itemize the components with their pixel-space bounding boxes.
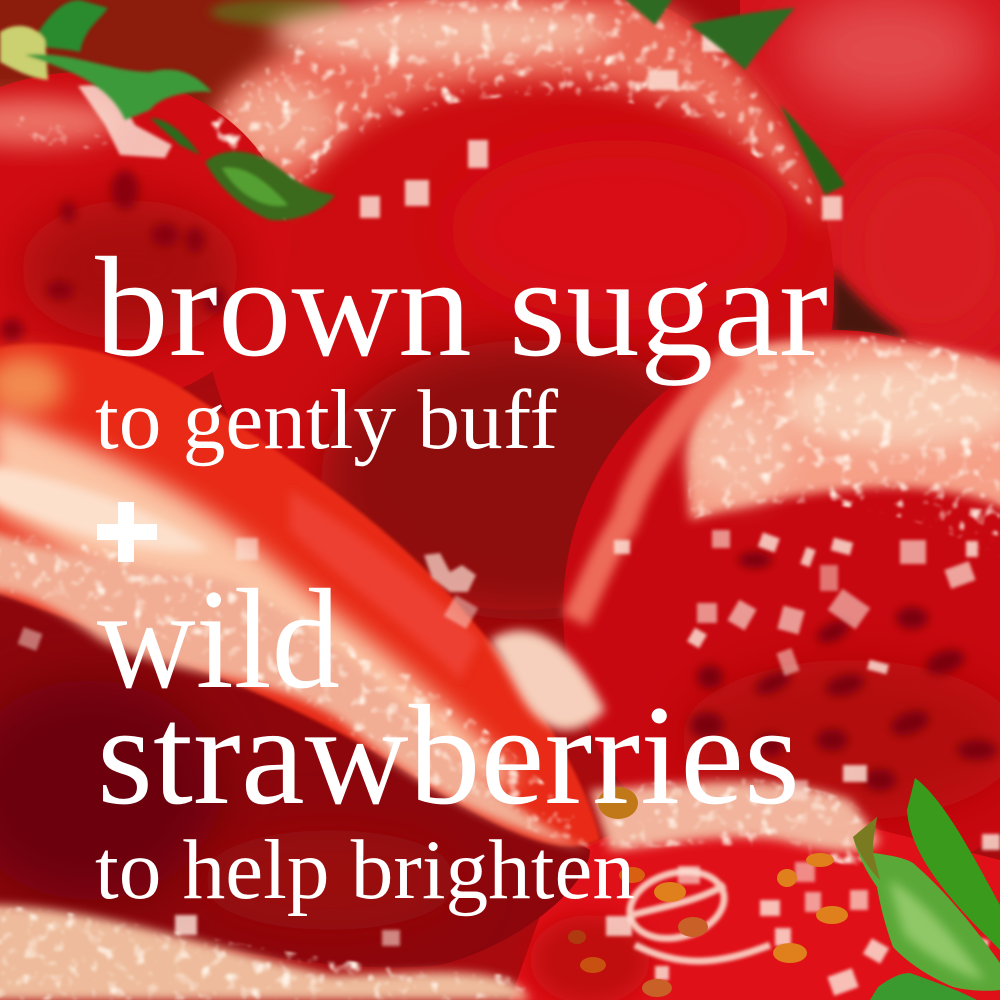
red flesh rim highlight <box>290 490 480 680</box>
dark backdrop top left <box>0 0 340 110</box>
heading: strawberries: strawberries <box>97 676 800 834</box>
strawberry seeds <box>568 787 848 997</box>
orange tip <box>0 355 65 415</box>
subheading: to help brighten: to help brighten <box>95 823 635 917</box>
outer skin in deep red <box>0 590 590 967</box>
berry seeds <box>690 552 997 791</box>
skin dimples <box>0 170 227 342</box>
dark gap between berries <box>832 268 910 340</box>
bottom sugar pile <box>0 905 530 1000</box>
strawberry leaf, top left <box>0 0 335 220</box>
sparkling pile beside the flesh <box>490 631 605 730</box>
heading: wild: wild <box>97 560 340 718</box>
strawberry leaves, bottom right <box>853 778 1000 1000</box>
pale flesh band <box>0 410 520 790</box>
olive blur at top <box>210 0 350 26</box>
top left strawberry <box>0 72 290 408</box>
heading: brown sugar: brown sugar <box>95 228 828 386</box>
cut face <box>0 344 600 846</box>
sugar crust on the cut edge <box>0 530 590 850</box>
right strawberry <box>563 330 1000 890</box>
glossy swirl <box>622 862 770 961</box>
icon: plus sign <box>97 502 157 562</box>
subheading: to gently buff: to gently buff <box>95 373 559 467</box>
blurred berry top right <box>740 0 1000 400</box>
strawberry leaves, top right <box>620 0 845 195</box>
bottom right strawberry <box>510 782 1000 1000</box>
thin sugar arc on the berry rim <box>575 355 735 620</box>
cut strawberry <box>0 344 605 967</box>
top centre strawberry <box>202 0 834 620</box>
